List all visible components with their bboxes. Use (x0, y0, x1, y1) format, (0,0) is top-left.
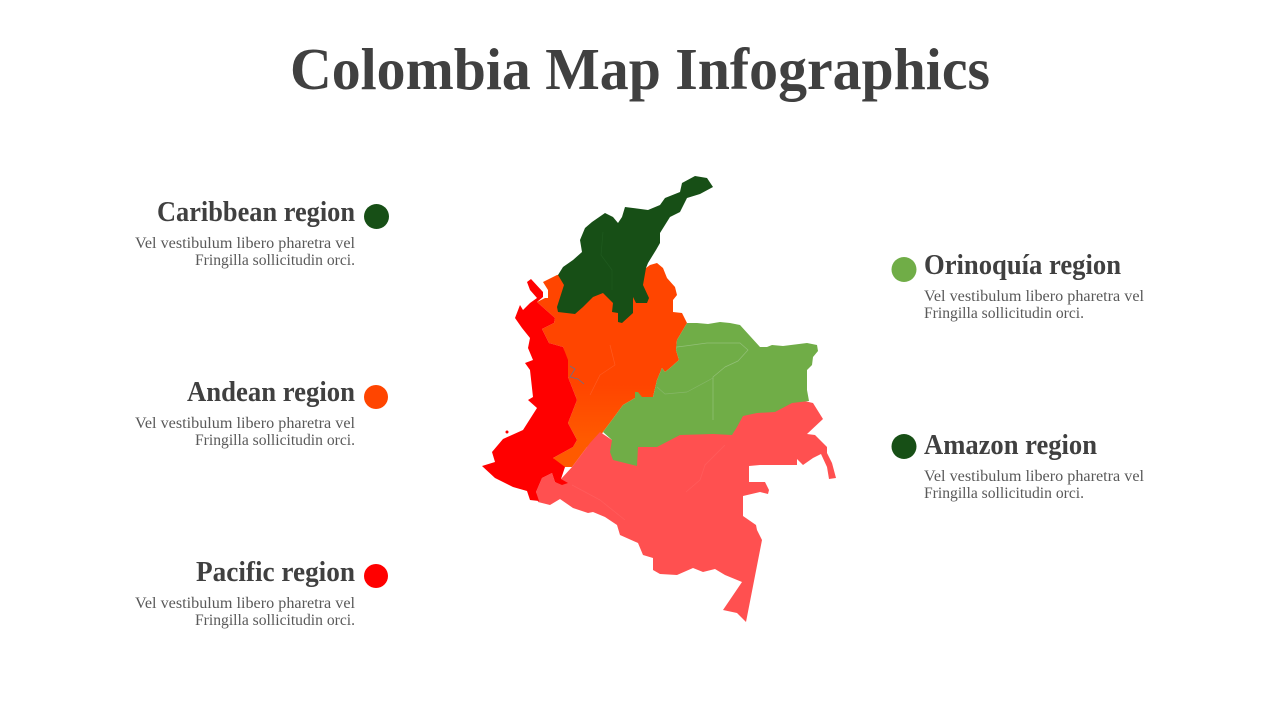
legend: Orinoquía region: Vel vestibulum libero pharetra vel (924, 288, 1145, 305)
legend: Amazon region: Vel vestibulum libero pharetra vel (924, 468, 1145, 485)
map region: Caribbean (557, 176, 713, 323)
legend: Andean region: Vel vestibulum libero pharetra vel (135, 415, 356, 432)
map of Colombia (482, 176, 836, 622)
legend: Amazon region (892, 430, 1145, 502)
legend: Pacific region: Fringilla sollicitudin orci. (195, 612, 355, 629)
legend: Caribbean region: Vel vestibulum libero pharetra vel (135, 235, 356, 252)
marker: Amazon (892, 434, 916, 459)
legend: Pacific region (135, 557, 388, 629)
legend: Orinoquía region (892, 250, 1145, 322)
legend: Pacific region: Vel vestibulum libero pharetra vel (135, 595, 356, 612)
legend: Andean region: Andean region (187, 377, 355, 408)
map region: Orinoquía (603, 322, 818, 466)
legend: Caribbean region (135, 197, 389, 269)
legend: Amazon region: Amazon region (924, 430, 1097, 461)
legend: Pacific region: Pacific region (196, 557, 355, 588)
legend: Andean region (135, 377, 388, 449)
map region: Amazon (536, 400, 836, 622)
legend: Amazon region: Fringilla sollicitudin orci. (924, 485, 1084, 502)
legend: Andean region: Fringilla sollicitudin orci. (195, 432, 355, 449)
legend: Orinoquía region: Orinoquía region (924, 250, 1121, 281)
legend: Caribbean region: Fringilla sollicitudin orci. (195, 252, 355, 269)
legend: Orinoquía region: Fringilla sollicitudin orci. (924, 305, 1084, 322)
map region: Andean (537, 263, 687, 467)
marker: Andean (364, 385, 388, 409)
title: Colombia Map Infographics (290, 36, 990, 102)
marker: Pacific (364, 564, 388, 588)
map region: Pacific (482, 279, 577, 501)
marker: Caribbean (364, 204, 389, 229)
marker: Orinoquía (892, 257, 916, 282)
legend: Caribbean region: Caribbean region (157, 197, 355, 228)
